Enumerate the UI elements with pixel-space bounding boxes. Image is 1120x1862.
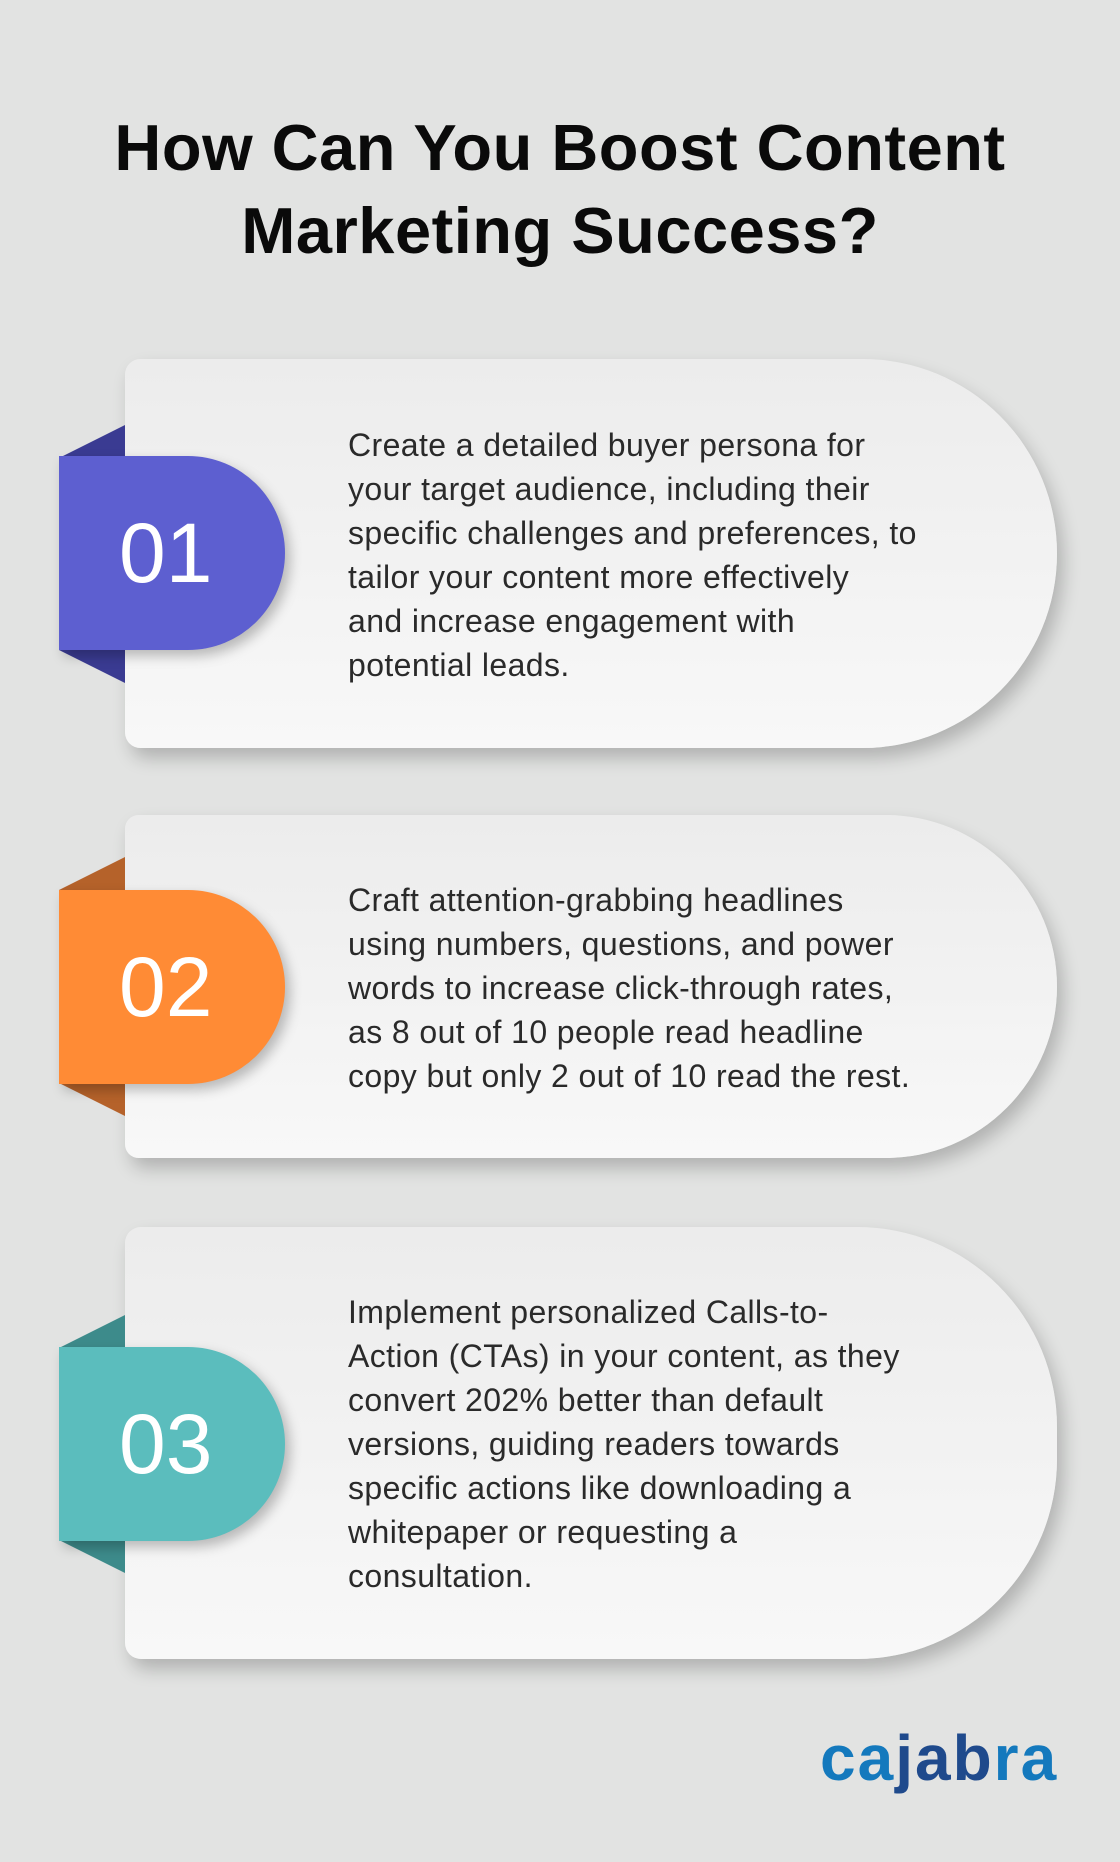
- text block 3: convert 202% better than default: [348, 1382, 823, 1418]
- fold bottom 3: [61, 1541, 125, 1573]
- text block 2: as 8 out of 10 people read headline: [348, 1014, 864, 1050]
- fold top 2: [59, 857, 125, 890]
- text block 1: potential leads.: [348, 647, 570, 683]
- text block 2: [348, 882, 910, 1094]
- panel: step 2: [58, 815, 1071, 1176]
- text block 3: Implement personalized Calls-to-: [348, 1294, 829, 1330]
- logo: cajabra: cajabra: [820, 1722, 1058, 1794]
- text block 3: consultation.: [348, 1558, 533, 1594]
- text block 1: [348, 427, 917, 683]
- fold bottom 1: [59, 650, 125, 683]
- number tab 02: [59, 890, 285, 1084]
- title: [114, 111, 1006, 267]
- text block 3: whitepaper or requesting a: [348, 1514, 737, 1550]
- panel: step 3: [58, 1227, 1072, 1678]
- card 1: [125, 359, 1057, 748]
- text block 3: specific actions like downloading a: [348, 1470, 851, 1506]
- card 3: [125, 1227, 1057, 1659]
- number tab 02: 02: [119, 940, 212, 1034]
- card 2: [125, 815, 1057, 1158]
- number tab 03: 03: [119, 1397, 212, 1491]
- text block 3: [348, 1294, 900, 1594]
- number tab 01: 01: [119, 506, 212, 600]
- text block 3: versions, guiding readers towards: [348, 1426, 840, 1462]
- text block 2: copy but only 2 out of 10 read the rest.: [348, 1058, 910, 1094]
- number tab 03: [59, 1347, 285, 1541]
- text block 2: Craft attention-grabbing headlines: [348, 882, 844, 918]
- text block 2: words to increase click-through rates,: [348, 970, 893, 1006]
- text block 1: specific challenges and preferences, to: [348, 515, 917, 551]
- text block 1: and increase engagement with: [348, 603, 795, 639]
- fold top 3: [61, 1315, 125, 1347]
- text block 1: your target audience, including their: [348, 471, 870, 507]
- title: How Can You Boost Content: [114, 111, 1006, 184]
- number tab 01: [59, 456, 285, 650]
- text block 1: Create a detailed buyer persona for: [348, 427, 865, 463]
- fold bottom 2: [61, 1084, 125, 1116]
- text block 3: Action (CTAs) in your content, as they: [348, 1338, 900, 1374]
- title: Marketing Success?: [241, 194, 879, 267]
- text block 1: tailor your content more effectively: [348, 559, 849, 595]
- text block 2: using numbers, questions, and power: [348, 926, 894, 962]
- panel: step 1: [58, 359, 1071, 766]
- fold top 1: [63, 425, 125, 456]
